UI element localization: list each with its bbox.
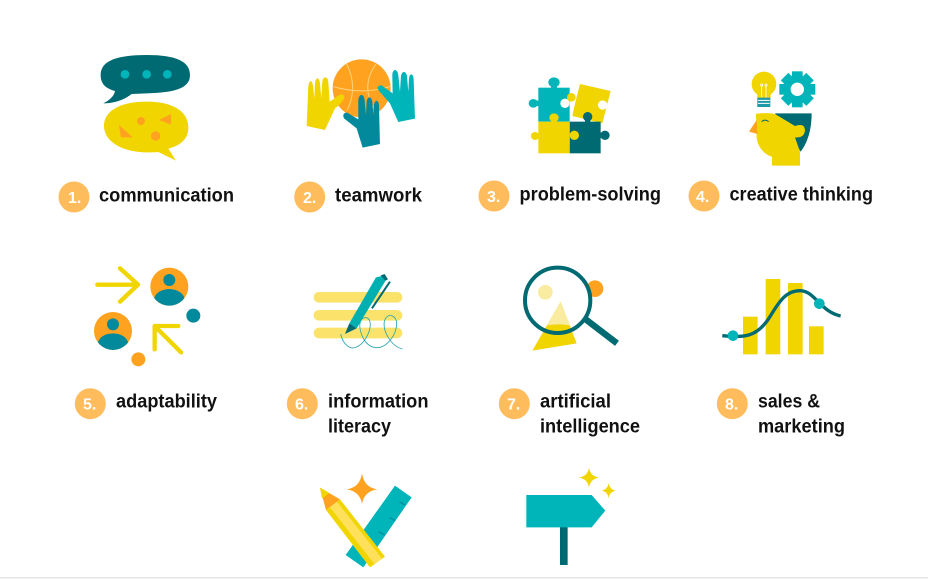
item 8: sales and marketing <box>717 279 845 438</box>
icon: puzzle pieces <box>529 77 611 153</box>
item 7: artificial intelligence <box>499 268 640 438</box>
label: artificial intelligence: intelligence <box>540 416 640 438</box>
label: problem-solving <box>478 180 661 212</box>
label: information literacy: information <box>328 391 428 413</box>
icon: people and arrows <box>94 268 200 366</box>
label: creative thinking: 4. <box>696 189 709 206</box>
item 3: problem-solving <box>478 77 661 212</box>
icon: pencil, ruler and star <box>320 473 412 567</box>
icon: bar chart with trend line <box>722 279 841 354</box>
label: communication: 1. <box>68 190 81 207</box>
item 6: information literacy <box>287 274 428 438</box>
label: sales and marketing <box>717 388 845 438</box>
label: communication <box>58 182 234 212</box>
label: problem-solving: 3. <box>487 189 500 206</box>
item 4: creative thinking <box>688 71 873 212</box>
label: communication: communication <box>99 184 234 206</box>
label: artificial intelligence <box>499 388 640 438</box>
label: adaptability: 5. <box>83 396 96 414</box>
label: information literacy: literacy <box>328 416 391 438</box>
label: information literacy <box>287 388 428 438</box>
item 2: teamwork <box>294 59 422 213</box>
label: sales and marketing: 8. <box>725 396 738 414</box>
item 5: adaptability <box>75 268 217 419</box>
label: artificial intelligence: 7. <box>507 396 520 414</box>
label: information literacy: 6. <box>295 396 308 414</box>
label: sales and marketing: marketing <box>758 416 845 438</box>
label: sales and marketing: sales & <box>758 391 820 413</box>
label: teamwork: 2. <box>303 190 316 207</box>
label: creative thinking: creative thinking <box>730 184 873 206</box>
label: problem-solving: problem-solving <box>520 184 661 206</box>
icon: signpost with sparkles <box>526 468 616 565</box>
icon: head with bulb and gear <box>749 71 815 166</box>
icon: magnifying glass <box>525 268 617 351</box>
label: adaptability: adaptability <box>116 391 217 413</box>
icon: pen writing on lines <box>314 274 403 349</box>
label: teamwork <box>294 182 422 212</box>
icon: hands on basketball <box>307 59 415 148</box>
label: creative thinking <box>688 180 873 212</box>
item 1: communication <box>58 55 234 212</box>
label: teamwork: teamwork <box>335 184 422 206</box>
label: adaptability <box>75 388 217 419</box>
icon: speech bubbles <box>101 55 190 161</box>
label: artificial intelligence: artificial <box>540 391 611 413</box>
